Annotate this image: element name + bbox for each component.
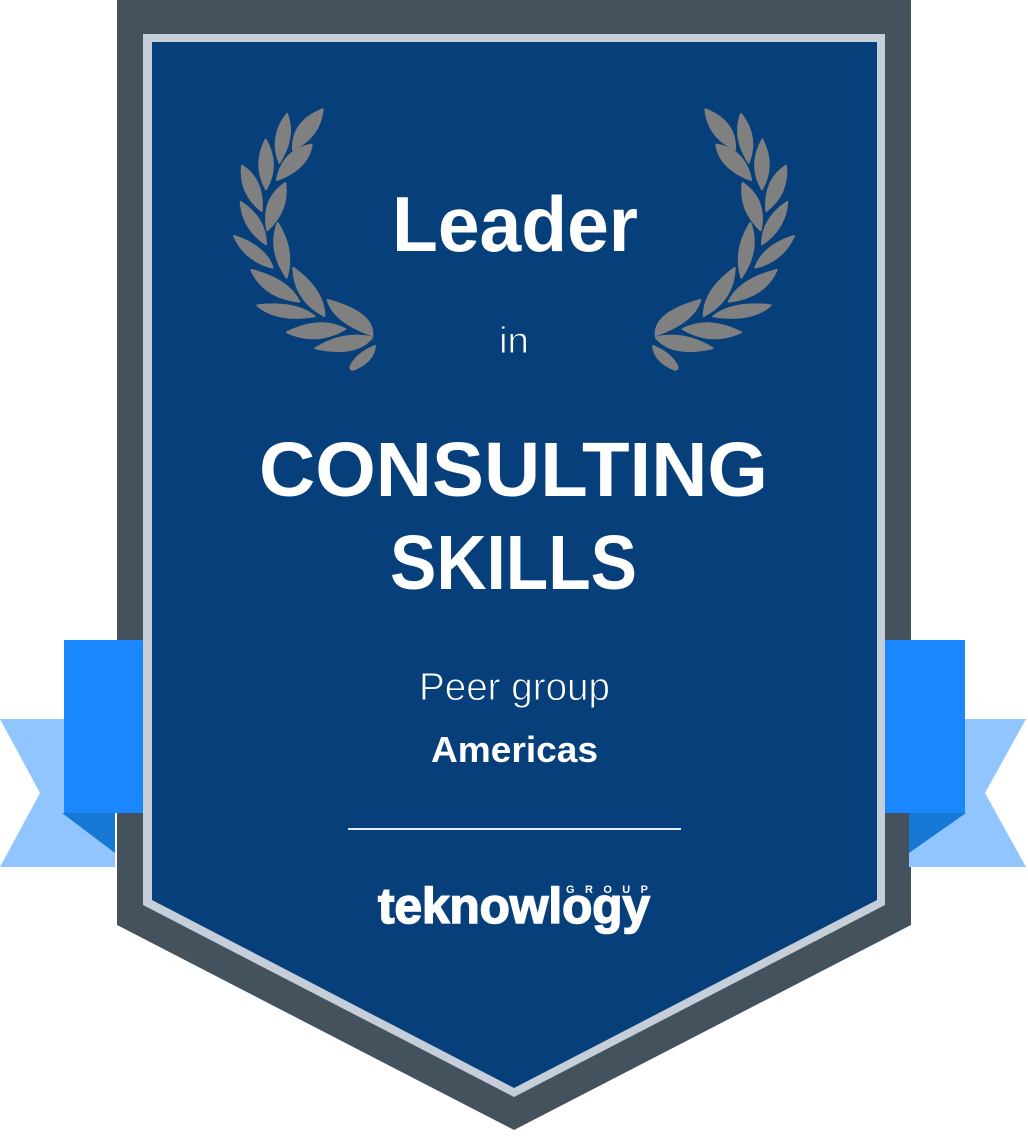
right ribbon fold	[909, 813, 966, 853]
icon: right laurel	[653, 109, 794, 370]
left ribbon band	[64, 640, 143, 813]
logo wordmark: teknowlogy	[378, 878, 650, 934]
shield silver border	[143, 34, 885, 1097]
shield navy panel	[152, 42, 877, 1088]
left ribbon fold	[62, 813, 115, 853]
heading: Leader: Leader	[392, 180, 638, 268]
divider line	[348, 828, 681, 830]
icon: left laurel	[234, 109, 375, 370]
text: in: in	[499, 320, 529, 361]
right ribbon tail	[909, 719, 1026, 867]
right ribbon band	[885, 640, 965, 813]
text: Peer group: Peer group	[419, 666, 610, 709]
shield outer border	[117, 0, 911, 1130]
logo sub-label: GROUP	[566, 884, 648, 896]
heading: SKILLS: SKILLS	[390, 520, 637, 606]
logo: teknowlogy group	[378, 878, 650, 934]
left ribbon tail	[0, 719, 115, 867]
text: Americas: Americas	[431, 729, 598, 770]
heading: CONSULTING: CONSULTING	[259, 427, 768, 513]
